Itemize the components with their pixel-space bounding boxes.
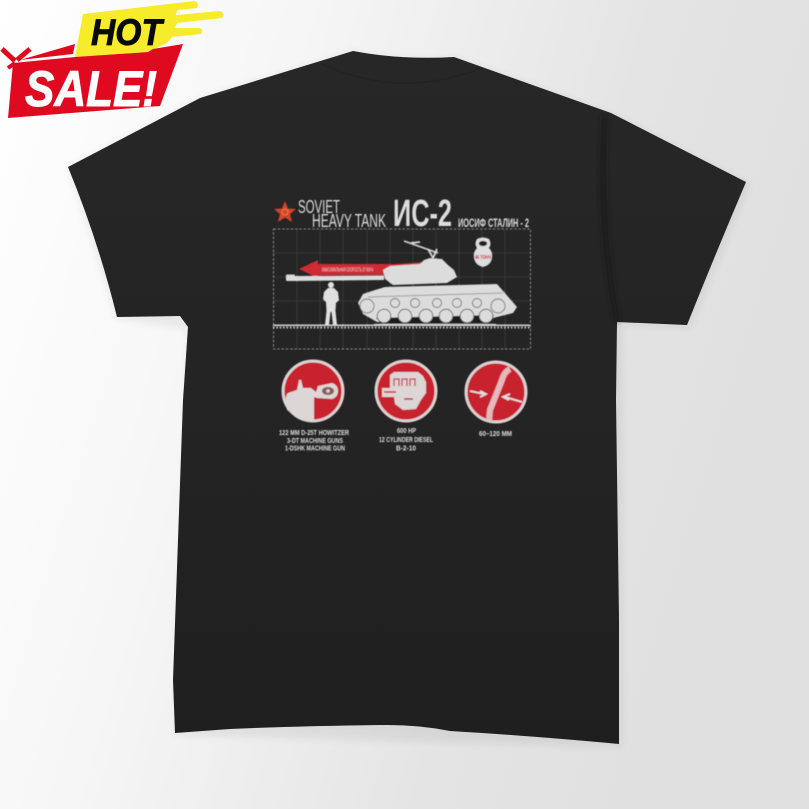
caption: armament: 1-DSHK MACHINE GUN bbox=[285, 444, 345, 452]
caption: armament bbox=[279, 428, 350, 452]
badge: hot sale bbox=[2, 1, 224, 118]
title line: heavy tank: HEAVY TANK bbox=[312, 211, 386, 231]
title line: soviet: SOVIET bbox=[298, 197, 340, 217]
caption: engine: В-2-10 bbox=[396, 444, 416, 452]
title: tank name: ИС-2 bbox=[393, 193, 452, 235]
tank return rollers bbox=[360, 298, 505, 313]
caption: engine: 12 CYLINDER DIESEL bbox=[379, 435, 433, 444]
tank machine gun bbox=[404, 241, 438, 258]
tank road wheels bbox=[374, 309, 496, 324]
caption: armament: 122 MM D-25T HOWITZER bbox=[279, 428, 350, 437]
badge word: sale: SALE! bbox=[25, 61, 157, 117]
badge burst lines bbox=[2, 49, 30, 68]
icon: red star bbox=[274, 201, 296, 222]
weight label: 46 ТОНН bbox=[475, 255, 491, 261]
captions bbox=[279, 426, 512, 452]
caption: engine bbox=[379, 426, 433, 452]
tank turret bbox=[383, 258, 457, 285]
soldier silhouette bbox=[323, 282, 339, 325]
speed label: МАКСИМАЛЬНАЯ СКОРОСТЬ 37 КМ/Ч bbox=[322, 268, 373, 274]
badge red panel bbox=[8, 44, 183, 118]
title bbox=[298, 193, 529, 235]
caption: armament: 3-DT MACHINE GUNS bbox=[287, 436, 343, 445]
tank track detail bbox=[368, 293, 503, 297]
icon: armament badge bbox=[283, 361, 343, 421]
print artwork bbox=[273, 193, 530, 452]
badge yellow speed shape bbox=[75, 1, 224, 57]
t-shirt bbox=[68, 51, 750, 747]
caption: engine: 600 HP bbox=[397, 426, 416, 435]
icon: engine badge bbox=[376, 361, 436, 421]
caption: armor: 60–120 MM bbox=[479, 429, 512, 438]
badge flap bbox=[20, 44, 75, 60]
icon: armor thickness badge bbox=[466, 362, 526, 422]
badge word: hot: HOT bbox=[91, 12, 165, 53]
icon: kettlebell weight bbox=[474, 238, 492, 267]
tank gun barrel bbox=[286, 274, 384, 281]
subtitle: full name: ИОСИФ СТАЛИН - 2 bbox=[458, 218, 529, 230]
tank silhouette bbox=[286, 241, 517, 324]
ground line bbox=[273, 324, 530, 328]
blueprint grid frame bbox=[273, 229, 530, 349]
tank hull bbox=[358, 284, 517, 322]
speed arrow bbox=[299, 260, 425, 278]
